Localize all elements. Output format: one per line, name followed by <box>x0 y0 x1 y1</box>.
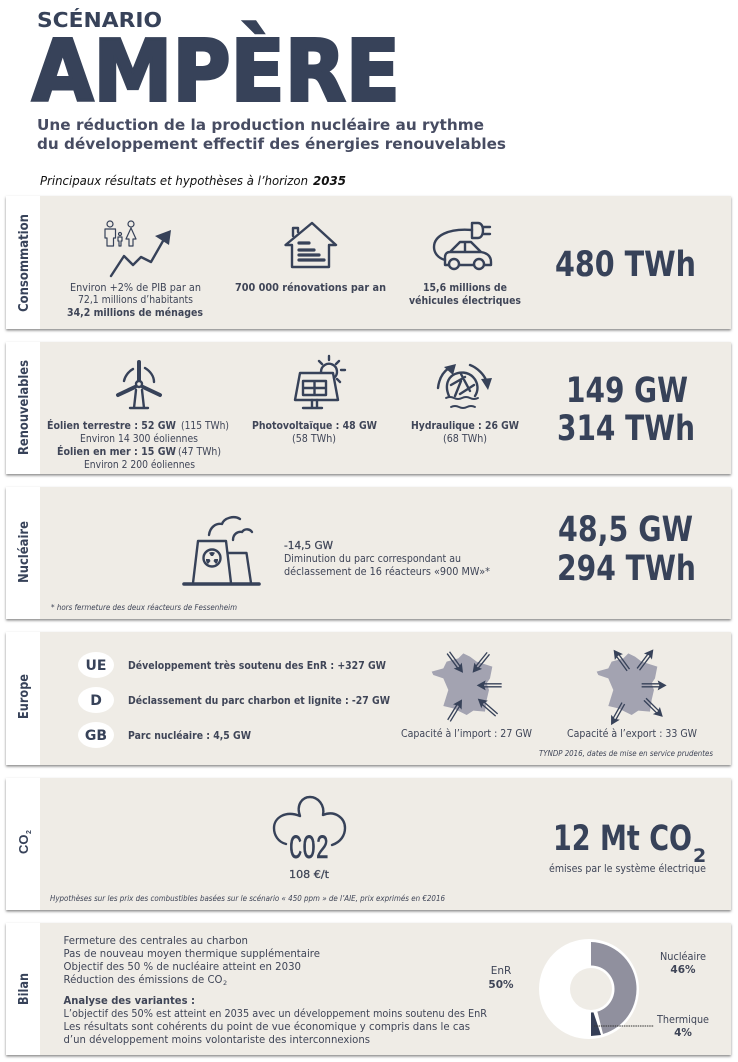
title: scénario: SCÉNARIO <box>37 8 162 32</box>
label: thermique: Thermique <box>656 1014 709 1026</box>
text: éolien: Éolien terrestre : 52 GW <box>47 419 176 432</box>
text: éolien: Environ 14 300 éoliennes <box>80 433 198 445</box>
text: rénovations: 700 000 rénovations par an <box>235 282 386 294</box>
label: enr: EnR <box>491 965 511 977</box>
label: nucléaire: Nucléaire <box>660 951 706 963</box>
value: consommation: 480 TWh <box>555 245 696 285</box>
text: population: 72,1 millions d’habitants <box>78 294 193 306</box>
text: conclusions: 2 <box>223 979 227 987</box>
value: nucléaire: 294 TWh <box>557 549 696 589</box>
text: hydraulique: (68 TWh) <box>443 433 487 445</box>
panel label: europe: Europe <box>17 674 32 719</box>
horizon line: 2035 <box>313 174 346 188</box>
text: conclusions <box>64 935 320 987</box>
value: co2: 2 <box>693 845 706 867</box>
text: éolien <box>47 419 229 471</box>
icon: family and growth <box>105 221 171 276</box>
footnote: tyndp: TYNDP 2016, dates de mise en service prudentes <box>539 749 713 758</box>
panel: nucléaire <box>6 487 731 619</box>
value: co2 <box>549 819 706 875</box>
footnote: fessenheim: * hors fermeture des deux réacteurs de Fessenheim <box>51 602 237 612</box>
panel: bilan <box>6 923 731 1055</box>
horizon line: Principaux résultats et hypothèses à l’horizon <box>40 174 308 188</box>
donut chart <box>539 939 654 1039</box>
subtitle <box>37 116 506 153</box>
text: nuclear reduction: déclassement de 16 réacteurs «900 MW»* <box>284 566 490 578</box>
text: éolien: (47 TWh) <box>178 446 221 458</box>
text: hydraulique: Hydraulique : 26 GW <box>411 420 519 432</box>
map: export arrows <box>597 646 667 728</box>
text: photovoltaïque: Photovoltaïque : 48 GW <box>252 420 377 432</box>
icon: solar panel <box>295 356 345 408</box>
value: renouvelables <box>557 371 695 449</box>
text: éolien: (115 TWh) <box>181 420 229 432</box>
text: photovoltaïque: (58 TWh) <box>292 433 336 445</box>
row: D <box>78 687 390 713</box>
text: population: 34,2 millions de ménages <box>67 307 203 319</box>
text: analyse des variantes <box>64 995 487 1046</box>
text: analyse des variantes: d’un développement moins volontariste des interconnexions <box>64 1034 370 1046</box>
text: conclusions: Pas de nouveau moyen thermique supplémentaire <box>64 948 320 960</box>
label: enr <box>488 965 514 991</box>
panel label: co2: 2 <box>26 830 33 834</box>
row: UE: Développement très soutenu des EnR : +327 GW <box>128 660 386 672</box>
row: UE <box>78 652 386 678</box>
label: nucléaire <box>660 951 706 976</box>
icon: wind turbine <box>118 362 160 408</box>
label: thermique <box>656 1014 709 1039</box>
icon: electric car <box>434 223 491 269</box>
value: renouvelables: 149 GW <box>566 371 688 411</box>
row: D: D <box>90 693 102 709</box>
text: import capacity: Capacité à l’import : 27 GW <box>401 728 533 740</box>
title block <box>32 8 506 188</box>
panel label: bilan: Bilan <box>17 973 32 1005</box>
panel: europe <box>6 632 731 765</box>
text: véhicules: véhicules électriques <box>409 295 521 307</box>
row: UE: UE <box>86 658 106 674</box>
footnote: combustibles: Hypothèses sur les prix des combustibles basées sur le scénario « 450 ppm » de l’AIE, prix exprimés en €2016 <box>50 893 445 903</box>
row: GB: GB <box>85 728 107 744</box>
label: thermique: 4% <box>674 1027 692 1039</box>
panel label: nucléaire: Nucléaire <box>17 521 32 583</box>
panel: co2 <box>6 778 731 910</box>
map: import arrows <box>432 650 502 723</box>
row: GB: Parc nucléaire : 4,5 GW <box>128 730 251 742</box>
row: D: Déclassement du parc charbon et lignite : -27 GW <box>128 695 390 707</box>
text: export capacity: Capacité à l’export : 33 GW <box>567 728 698 740</box>
icon: nuclear plant <box>184 517 259 584</box>
label: enr: 50% <box>488 979 514 991</box>
value: co2: émises par le système électrique <box>549 863 706 875</box>
value: co2: 12 Mt CO <box>553 819 692 859</box>
row: GB <box>78 722 251 748</box>
text: analyse des variantes: L’objectif des 50% est atteint en 2035 avec un développement moins soutenu des EnR <box>64 1008 487 1020</box>
text: photovoltaïque <box>252 420 377 445</box>
value: renouvelables: 314 TWh <box>557 409 695 449</box>
text: conclusions: Réduction des émissions de CO <box>64 974 222 986</box>
text: analyse des variantes: Analyse des variantes : <box>64 995 195 1007</box>
text: conclusions: Objectif des 50 % de nucléaire atteint en 2030 <box>64 961 301 973</box>
label: nucléaire: 46% <box>670 964 696 976</box>
value: nucléaire: 48,5 GW <box>558 510 693 550</box>
icon: house <box>286 223 336 267</box>
panel: renouvelables <box>6 342 731 474</box>
subtitle: Une réduction de la production nucléaire au rythme <box>37 116 484 134</box>
text: population: Environ +2% de PIB par an <box>70 282 201 294</box>
text: éolien: Éolien en mer : 15 GW <box>57 445 176 458</box>
title: ampère: AMPÈRE <box>32 20 400 122</box>
icon: co2 cloud: CO2 <box>289 831 329 869</box>
panel label: renouvelables: Renouvelables <box>17 360 32 455</box>
text: nuclear reduction <box>284 540 490 578</box>
panel label: consommation: Consommation <box>17 214 32 312</box>
panel label: co2: CO <box>16 834 31 854</box>
text: population <box>67 282 203 319</box>
icon: co2 cloud <box>274 797 345 869</box>
text: analyse des variantes: Les résultats sont cohérents du point de vue économique y compris dans le cas <box>64 1021 470 1033</box>
text: carbon price: 108 €/t <box>289 869 329 881</box>
text: véhicules: 15,6 millions de <box>423 282 507 294</box>
text: éolien: Environ 2 200 éoliennes <box>84 459 195 471</box>
text: nuclear reduction: Diminution du parc correspondant au <box>284 553 461 565</box>
text: conclusions: Fermeture des centrales au charbon <box>64 935 248 947</box>
subtitle: du développement effectif des énergies renouvelables <box>37 135 506 153</box>
panel: consommation <box>6 196 731 329</box>
icon: hydro turbine <box>438 364 492 408</box>
text: hydraulique <box>411 420 519 445</box>
text: nuclear reduction: -14,5 GW <box>284 540 334 552</box>
text: véhicules <box>409 282 521 307</box>
value: nucléaire <box>557 510 696 589</box>
